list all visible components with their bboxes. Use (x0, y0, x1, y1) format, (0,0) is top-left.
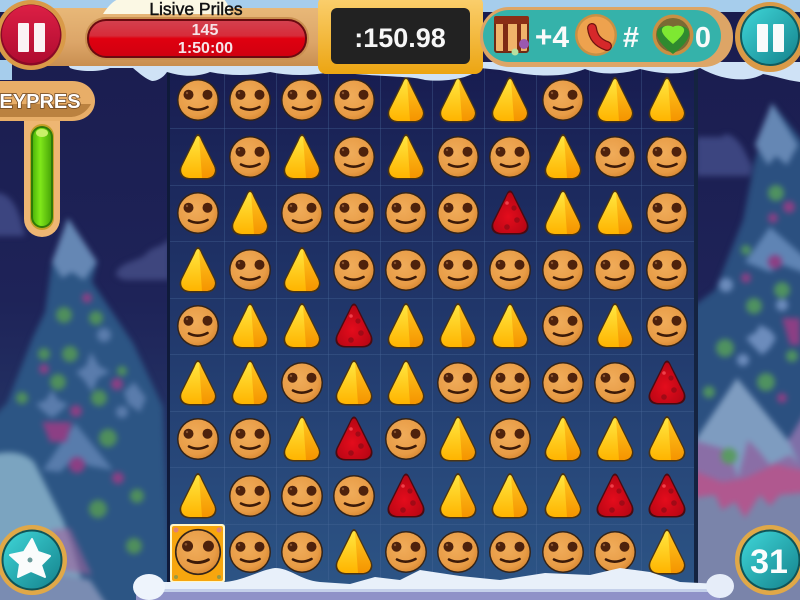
green gauge (30, 124, 54, 230)
timer panel: :150.98 (354, 23, 446, 53)
label: #: # (623, 22, 639, 54)
light sky strip at the top (0, 0, 800, 80)
star button (0, 525, 67, 595)
row 7 (177, 416, 685, 462)
icon: green heart (652, 14, 694, 56)
left red pause button (0, 0, 66, 70)
label plate: EYPRES (0, 81, 95, 121)
top snow fringe (66, 62, 800, 82)
tile grid: cookies and cones (175, 77, 688, 575)
status panel: bonus counters (480, 7, 733, 67)
top wood bar (40, 8, 325, 66)
red progress bar with score and time: 1:50:00 (178, 40, 233, 57)
label plate: EYPRES: EYPRES (0, 91, 81, 113)
row 6 (180, 360, 686, 406)
selected tile highlight (170, 524, 225, 583)
red progress bar with score and time (85, 17, 309, 60)
icon: sausage (575, 14, 617, 56)
label: 0: 0 (695, 22, 711, 54)
moves counter button: 31 (750, 543, 788, 581)
row 4 (180, 247, 688, 292)
icon: gift box (494, 16, 529, 56)
row 8 (180, 473, 686, 518)
game board (167, 68, 698, 584)
label: +4: +4 (535, 21, 569, 54)
red progress bar with score and time: 145 (192, 22, 218, 39)
power meter (0, 81, 95, 237)
timer panel (318, 0, 483, 74)
meter frame (24, 100, 60, 237)
row 1 (177, 77, 685, 122)
row 5 (177, 303, 688, 348)
snow cap behind title (103, 0, 231, 14)
row 9 (175, 529, 685, 575)
row 3 (177, 190, 688, 236)
bottom snow ledge (133, 568, 734, 600)
right teal pause button (735, 2, 800, 72)
moves counter button (735, 525, 800, 595)
row 2 (180, 134, 688, 180)
